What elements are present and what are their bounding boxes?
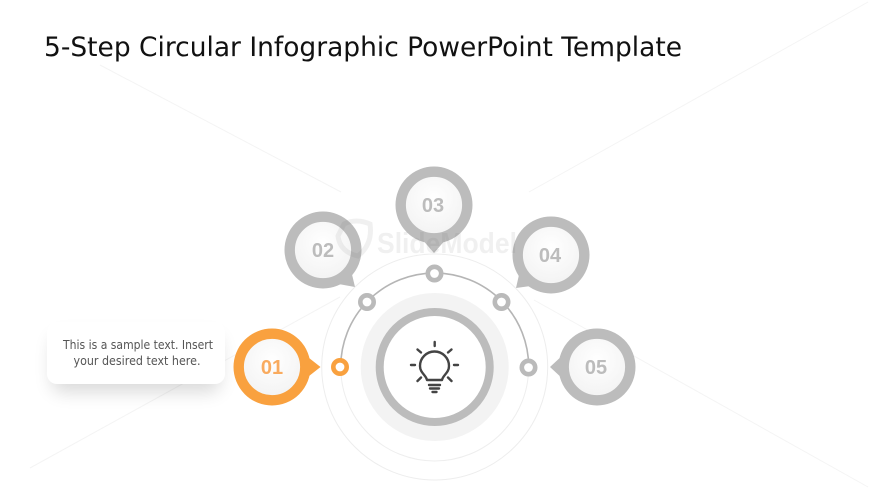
bubble 04 <box>516 222 584 288</box>
watermark <box>338 221 517 260</box>
callout: This is a sample text. Insert <box>62 338 213 352</box>
outer circle <box>322 254 548 480</box>
bubble 03: 03 <box>422 195 444 217</box>
bubble 03 <box>401 172 467 253</box>
center disc <box>361 293 509 441</box>
bubble 05: 05 <box>585 357 607 379</box>
bubble 01 <box>239 334 320 400</box>
callout: your desired text here. <box>74 354 200 368</box>
title: 5-Step Circular Infographic PowerPoint Template <box>44 32 682 63</box>
node 01 <box>333 360 347 374</box>
icon: light bulb <box>411 342 458 392</box>
watermark: SlideModel <box>377 228 517 260</box>
node 02 <box>360 295 374 309</box>
node 03 <box>428 267 441 280</box>
bubble 02 <box>290 217 356 287</box>
step arc <box>341 273 529 367</box>
bubble 05 <box>550 334 630 400</box>
node 05 <box>522 361 535 374</box>
inner circle <box>341 273 529 461</box>
callout <box>47 322 225 392</box>
bubble 02: 02 <box>312 240 334 262</box>
bubble 01: 01 <box>261 357 283 379</box>
bubble 04: 04 <box>539 245 562 267</box>
node 04 <box>495 295 508 309</box>
